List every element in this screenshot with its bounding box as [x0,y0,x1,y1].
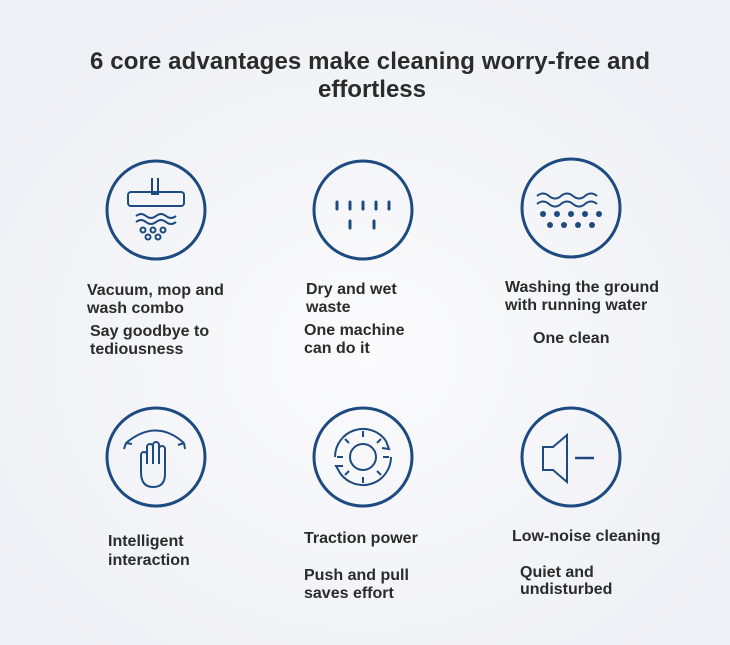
text: washing [504,279,659,347]
text: dry wet [304,281,405,357]
text: intelligent: interaction [108,552,190,569]
text: vacuum: tediousness [90,341,183,358]
text: washing: One clean [533,330,609,347]
text: low noise: Quiet and [520,564,594,581]
text: low noise: undisturbed [520,581,612,598]
text: traction: Traction power [304,530,418,547]
title: 6 core advantages make cleaning worry-free and [90,48,650,75]
text: vacuum: wash combo [86,300,184,317]
text: dry wet: Dry and wet [306,281,397,298]
text: intelligent [108,533,190,569]
text: intelligent: Intelligent [108,533,184,550]
text: dry wet: can do it [304,340,370,357]
text: traction [304,530,418,602]
text: dry wet: waste [305,299,351,316]
icon: water [522,159,620,257]
icon: vacuum mop [107,161,205,259]
icon: hand [107,408,205,506]
text: low noise: Low-noise cleaning [512,528,660,545]
text: low noise [512,528,660,598]
icon: low noise [522,408,620,506]
text: traction: saves effort [304,585,394,602]
text: washing: Washing the ground [505,279,659,296]
title [90,48,650,103]
text: traction: Push and pull [304,567,409,584]
icon: traction [314,408,412,506]
text: washing: with running water [504,297,647,314]
text: vacuum: Vacuum, mop and [87,282,224,299]
text: vacuum: Say goodbye to [90,323,209,340]
icon: dry wet [314,161,412,259]
text: vacuum [86,282,224,358]
text: dry wet: One machine [304,322,405,339]
title: effortless [318,76,426,103]
